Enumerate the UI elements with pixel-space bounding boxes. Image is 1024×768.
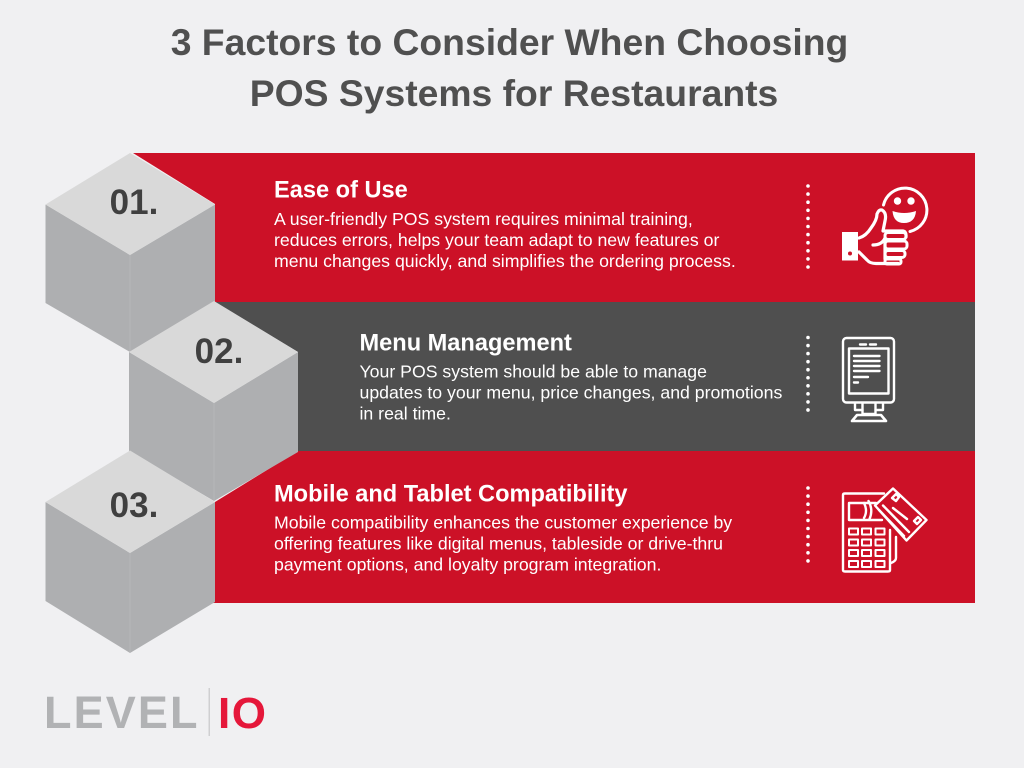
number 01: 01.	[110, 183, 158, 222]
text block: Menu Management: Menu Management	[360, 330, 572, 356]
logo: LEVEL IO	[44, 687, 266, 738]
text block: Ease of Use: A user-friendly POS system requires minimal training,	[274, 209, 693, 229]
text block: Ease of Use: menu changes quickly, and simplifies the ordering process.	[274, 251, 736, 271]
panel: factor 2 band	[215, 302, 975, 451]
text block: Mobile and Tablet Compatibility: payment options, and loyalty program integration.	[274, 554, 661, 574]
text block: Mobile and Tablet Compatibility: Mobile compatibility enhances the customer experience by	[274, 512, 732, 532]
logo: LEVEL IO: LEVEL	[44, 687, 198, 738]
text block: Ease of Use	[274, 178, 736, 271]
dotted divider 1	[806, 186, 810, 268]
dotted divider 3	[806, 488, 810, 569]
title: 3 Factors to Consider When Choosing	[171, 21, 848, 63]
logo: LEVEL IO: IO	[218, 689, 266, 738]
cube 1	[46, 153, 215, 352]
text block: Mobile and Tablet Compatibility: Mobile and Tablet Compatibility	[274, 482, 627, 508]
icon: card payment terminal	[843, 488, 926, 572]
icon: thumbs up with smiley	[842, 188, 927, 264]
text block: Ease of Use: reduces errors, helps your team adapt to new features or	[274, 230, 719, 250]
text block: Menu Management: updates to your menu, price changes, and promotions	[360, 382, 782, 402]
title: POS Systems for Restaurants	[250, 72, 778, 114]
text block: Ease of Use: Ease of Use	[274, 178, 408, 204]
icon: POS kiosk	[843, 338, 894, 421]
panel: factor 1 band	[133, 153, 975, 302]
text block: Menu Management: in real time.	[360, 404, 451, 424]
number 02: 02.	[195, 332, 243, 371]
title	[171, 21, 848, 114]
cube 3	[46, 450, 215, 653]
text block: Mobile and Tablet Compatibility: offering features like digital menus, tableside or drive-thru	[274, 534, 723, 554]
text block: Menu Management	[360, 330, 782, 424]
cube 2	[129, 301, 298, 501]
text block: Menu Management: Your POS system should be able to manage	[360, 362, 707, 382]
panel: factor 3 band	[213, 451, 975, 603]
dotted divider 2	[806, 338, 810, 418]
number 03: 03.	[110, 486, 158, 525]
text block: Mobile and Tablet Compatibility	[274, 482, 732, 574]
